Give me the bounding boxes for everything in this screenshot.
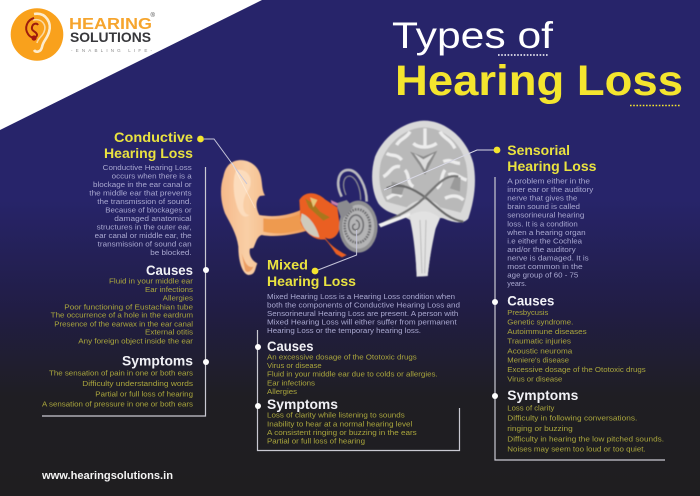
conductive description: ear canal or middle ear, the bbox=[95, 233, 192, 240]
logo: HEARING bbox=[69, 16, 152, 33]
sensorial description: i.e either the Cochlea bbox=[507, 238, 582, 245]
cochlea bbox=[331, 200, 378, 253]
conductive causes: Fluid in your middle ear bbox=[109, 278, 194, 286]
icon: ear in orange circle bbox=[11, 8, 63, 61]
conductive causes: Allergies bbox=[163, 296, 194, 303]
sensorial symptoms: Noises may seem too loud or too quiet. bbox=[507, 447, 646, 454]
sensorial symptoms: ringing or buzzing bbox=[507, 426, 573, 433]
mixed causes: Allergies bbox=[267, 389, 298, 396]
mixed description: Mixed Hearing Loss is a Hearing Loss condition when bbox=[267, 294, 455, 301]
conductive description: blockage in the ear canal or bbox=[93, 182, 192, 189]
sensorial symptoms: Symptoms bbox=[507, 387, 579, 403]
mixed symptoms: Partial or full loss of hearing bbox=[267, 439, 365, 446]
sensorial causes: Meniere's disease bbox=[507, 358, 569, 365]
sensorial description: most common in the bbox=[507, 264, 583, 271]
conductive symptoms: Symptoms bbox=[122, 353, 193, 369]
sensorial symptoms bbox=[492, 387, 664, 454]
conductive causes: Causes bbox=[146, 262, 193, 278]
conductive causes: Ear infections bbox=[145, 287, 194, 294]
mixed description: Hearing Loss or the temporary hearing loss. bbox=[267, 328, 421, 335]
sensorial description: age group of 60 - 75 bbox=[507, 273, 578, 280]
callout: conductive hearing loss: Conductive bbox=[114, 129, 193, 145]
callout: mixed hearing loss: Hearing Loss bbox=[267, 273, 356, 289]
sensorial symptoms: Loss of clarity bbox=[507, 405, 555, 412]
sensorial causes bbox=[492, 292, 646, 384]
conductive description: the middle ear that prevents bbox=[89, 190, 192, 198]
website footer: www.hearingsolutions.in bbox=[41, 470, 173, 482]
callout: conductive hearing loss bbox=[42, 129, 255, 416]
outer ear bbox=[221, 160, 307, 275]
callout: sensorial hearing loss bbox=[384, 142, 665, 460]
conductive description: Because of blockages or bbox=[105, 208, 192, 214]
callout: mixed hearing loss: Mixed bbox=[267, 257, 308, 273]
callout: conductive hearing loss: Hearing Loss bbox=[104, 145, 193, 161]
mixed causes: Ear infections bbox=[267, 380, 316, 387]
semicircular canals bbox=[338, 170, 367, 202]
sensorial description: inner ear or the auditory bbox=[507, 187, 594, 194]
conductive description: structures in the outer ear, bbox=[97, 224, 192, 232]
conductive description: the transmission of sound. bbox=[97, 199, 192, 206]
conductive description: Conductive Hearing Loss bbox=[103, 165, 192, 172]
conductive causes: Any foreign object inside the ear bbox=[78, 338, 194, 345]
sensorial description: nerve is damaged. It is bbox=[507, 255, 589, 262]
sensorial description bbox=[506, 178, 594, 288]
mixed causes: Fluid in your middle ear due to colds or allergies. bbox=[267, 372, 438, 379]
brain bbox=[372, 121, 475, 277]
sensorial symptoms: Difficulty in hearing the low pitched sounds. bbox=[507, 436, 664, 443]
mixed symptoms bbox=[255, 396, 417, 446]
mixed causes bbox=[255, 338, 438, 396]
conductive symptoms: The sensation of pain in one or both ears bbox=[49, 371, 194, 378]
callout: sensorial hearing loss: Sensorial bbox=[507, 142, 570, 158]
mixed description bbox=[267, 294, 460, 335]
sensorial description: A problem either in the bbox=[507, 178, 590, 185]
sensorial causes: Virus or disease bbox=[507, 377, 562, 384]
sensorial causes: Presbycusis bbox=[507, 310, 549, 317]
conductive causes: Poor functioning of Eustachian tube bbox=[64, 304, 193, 311]
sensorial description: and/or the auditory bbox=[507, 247, 576, 254]
title bbox=[392, 15, 683, 106]
mixed description: both the components of Conductive Hearing Loss and bbox=[267, 302, 460, 310]
title: Hearing Loss bbox=[395, 57, 683, 105]
conductive symptoms bbox=[42, 353, 209, 409]
conductive causes bbox=[51, 262, 209, 345]
logo: ® bbox=[150, 12, 156, 19]
mixed causes: Causes bbox=[267, 338, 314, 354]
sensorial description: loss. It is a condition bbox=[507, 221, 578, 228]
conductive causes: External otitis bbox=[145, 330, 194, 337]
mixed causes: An excessive dosage of the Ototoxic drugs bbox=[267, 354, 417, 361]
conductive causes: The occurrence of a hole in the eardrum bbox=[51, 313, 193, 320]
title: Types of bbox=[392, 15, 554, 56]
conductive symptoms: A sensation of pressure in one or both ears bbox=[42, 402, 194, 409]
callout: sensorial hearing loss: Hearing Loss bbox=[507, 158, 597, 174]
sensorial description: when a hearing organ bbox=[506, 230, 586, 237]
mixed causes: Virus or disease bbox=[267, 363, 322, 370]
sensorial causes: Genetic syndrome. bbox=[507, 320, 573, 327]
sensorial causes: Autoimmune diseases bbox=[507, 329, 587, 336]
sensorial description: sensorineural hearing bbox=[507, 213, 584, 220]
conductive causes: Presence of the earwax in the ear canal bbox=[54, 321, 193, 328]
mixed symptoms: A consistent ringing or buzzing in the ears bbox=[267, 430, 417, 437]
conductive description bbox=[89, 165, 192, 257]
sensorial causes: Causes bbox=[507, 292, 554, 308]
sensorial description: nerve that gives the bbox=[507, 196, 577, 203]
conductive symptoms: Partial or full loss of hearing bbox=[95, 391, 193, 398]
mixed description: Mixed Hearing Loss will either suffer from permanent bbox=[267, 320, 457, 327]
mixed symptoms: Inability to hear at a normal hearing level bbox=[267, 421, 413, 428]
sensorial causes: Traumatic injuries bbox=[507, 339, 572, 346]
conductive description: damaged anatomical bbox=[114, 216, 192, 223]
callout: mixed hearing loss bbox=[255, 230, 460, 450]
sensorial description: brain sound is called bbox=[507, 204, 580, 211]
conductive symptoms: Difficulty understanding words bbox=[82, 381, 194, 388]
mixed symptoms: Loss of clarity while listening to sounds bbox=[267, 413, 405, 420]
logo: SOLUTIONS bbox=[70, 30, 151, 45]
mixed symptoms: Symptoms bbox=[267, 396, 338, 412]
middle ear bbox=[299, 193, 347, 257]
sensorial symptoms: Difficulty in following conversations. bbox=[507, 416, 637, 423]
conductive description: be blocked. bbox=[150, 250, 192, 257]
sensorial causes: Acoustic neuroma bbox=[507, 348, 572, 355]
sensorial causes: Excessive dosage of the Ototoxic drugs bbox=[507, 367, 646, 374]
conductive description: transmission of sound can bbox=[98, 242, 192, 248]
logo: -ENABLING LIFE- bbox=[71, 48, 152, 53]
mixed description: Sensorineural Hearing Loss are present. A person with bbox=[267, 311, 458, 318]
conductive description: occurs when there is a bbox=[112, 174, 192, 180]
sensorial description: years. bbox=[507, 281, 527, 288]
illustration: ear anatomy and brain bbox=[221, 121, 475, 277]
logo bbox=[11, 8, 156, 61]
